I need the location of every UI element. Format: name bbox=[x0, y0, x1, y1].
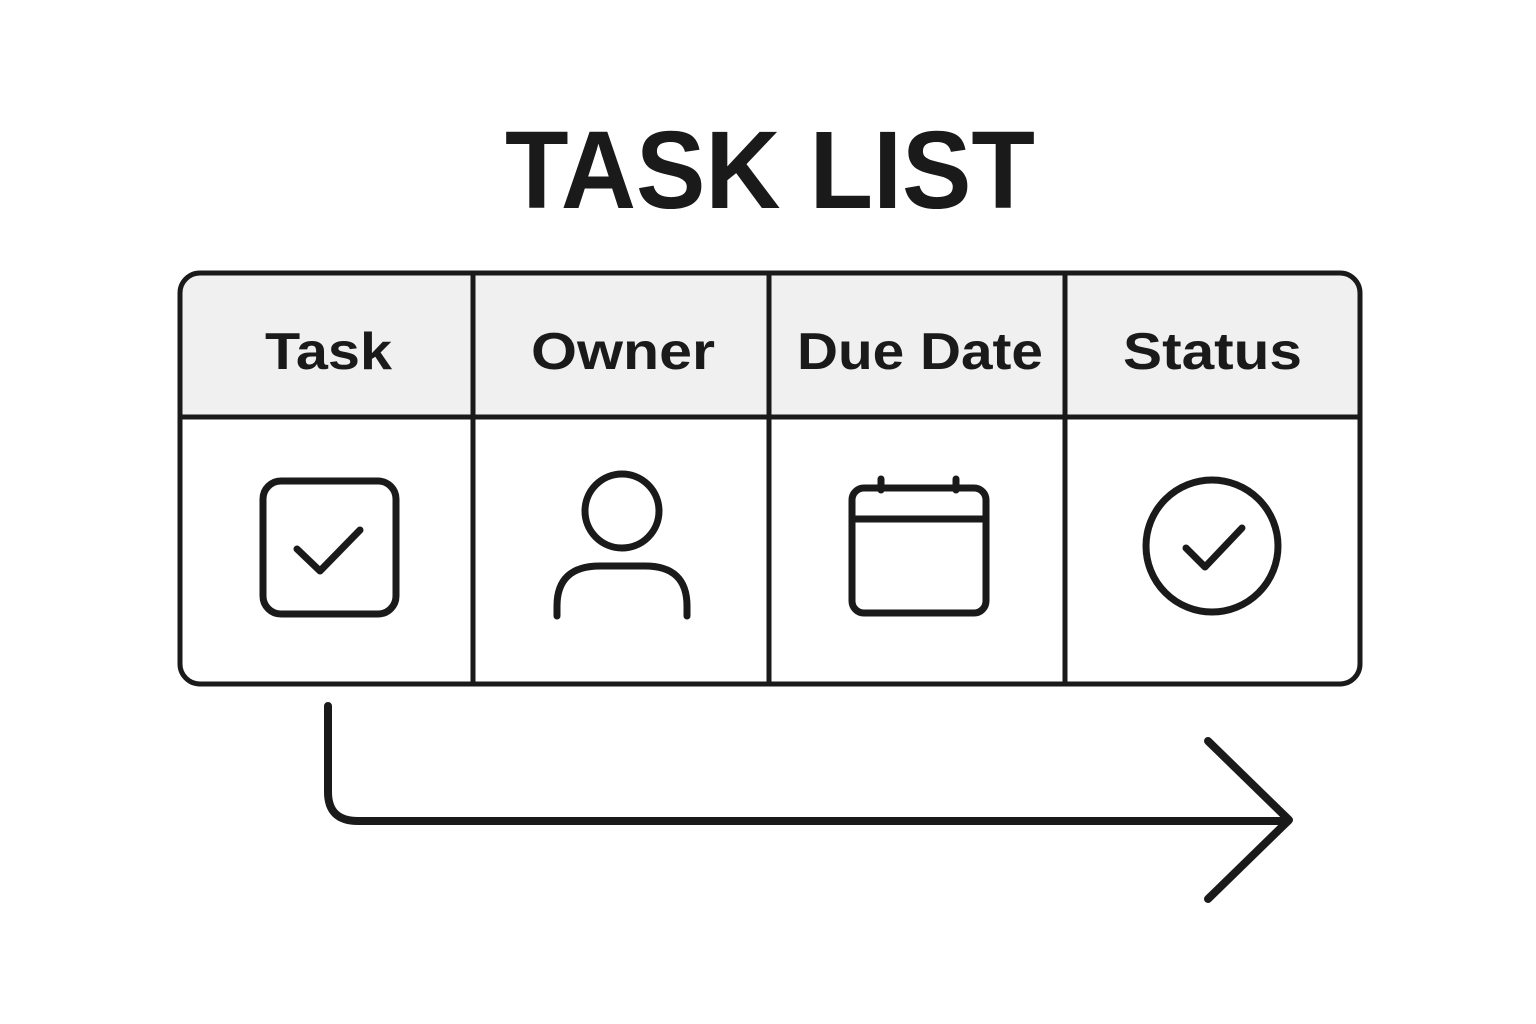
header: Due Date: Due Date bbox=[797, 323, 1043, 381]
arrow bbox=[328, 706, 1289, 899]
header: Owner: Owner bbox=[531, 323, 715, 381]
icon: calendar bbox=[852, 479, 986, 613]
header: Status: Status bbox=[1123, 323, 1302, 381]
table bbox=[180, 273, 1360, 684]
title: TASK LIST bbox=[505, 109, 1035, 232]
header: Task: Task bbox=[265, 323, 392, 381]
icon: status check circle bbox=[1146, 480, 1278, 612]
icon: checkbox bbox=[263, 481, 396, 614]
header row background bbox=[180, 273, 1360, 417]
icon: person bbox=[557, 474, 687, 616]
